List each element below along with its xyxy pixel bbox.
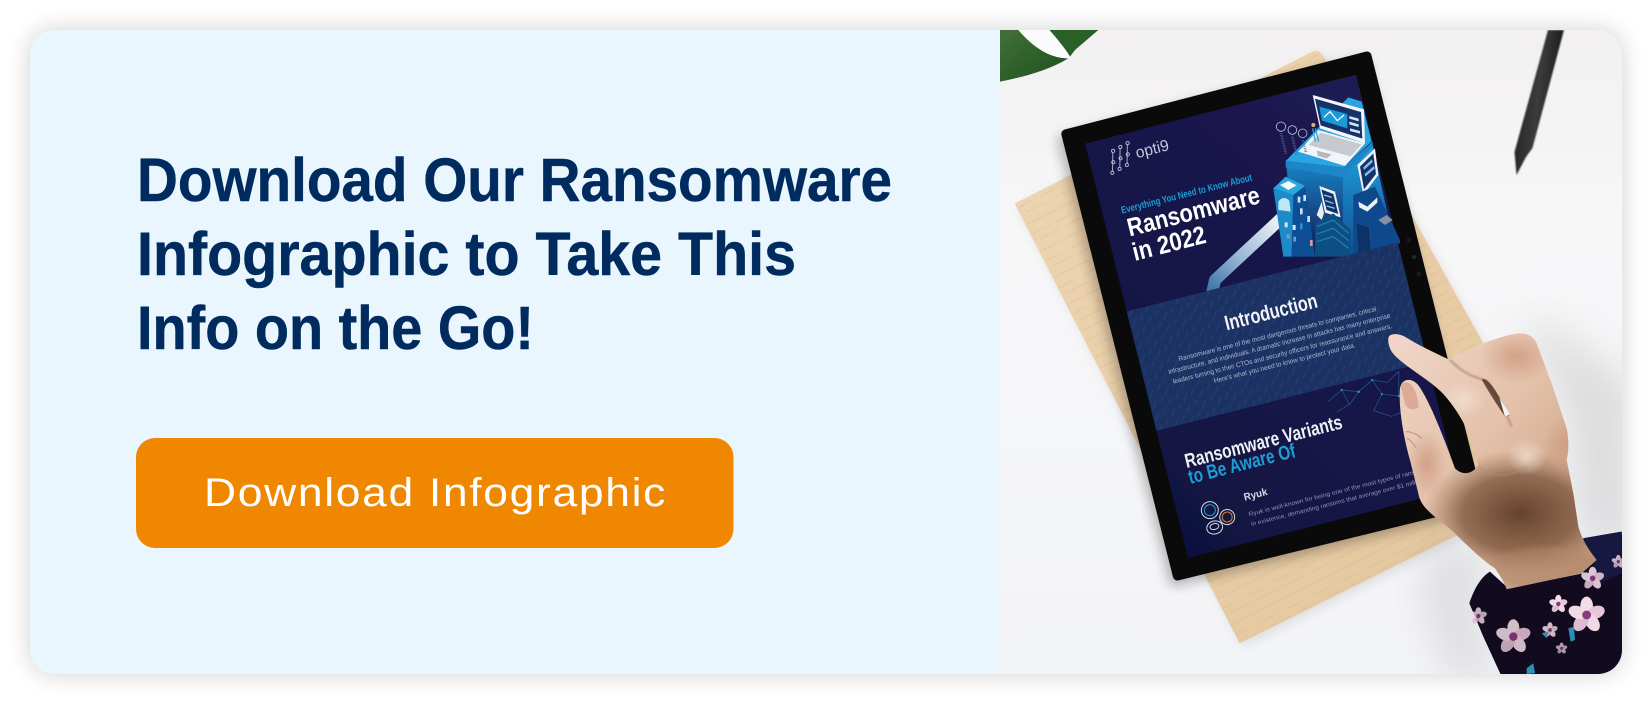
network pattern (1328, 371, 1401, 417)
sleeve (1469, 532, 1622, 674)
hero title: in 2022 (1129, 221, 1209, 267)
variant: ryuk: Ryuk (1243, 487, 1269, 504)
leaf (1000, 30, 1098, 82)
introduction heading: Introduction (1222, 290, 1320, 335)
screen content (1110, 140, 1424, 535)
hero title (1120, 174, 1260, 261)
hand shadow (1532, 324, 1622, 538)
introduction paragraph: leaders turning to their CTOs and security officers for reassurance and answers. (1172, 323, 1393, 386)
introduction paragraph: Ransomware is one of the most dangerous threats to companies, critical (1178, 306, 1378, 363)
button: download infographic: Download Infographic (204, 471, 667, 515)
pen (1514, 30, 1564, 175)
variant: ryuk: Ryuk is well-known for being one of the most types of ransomware (1248, 464, 1439, 518)
notebook (1015, 51, 1485, 645)
finger gap (1482, 379, 1510, 417)
panel: left call to action background (30, 30, 1010, 674)
illustration: isometric server towers and laptop (1212, 95, 1400, 293)
fingernails (1388, 337, 1389, 338)
heading: Info on the Go! (137, 294, 534, 362)
introduction paragraph: infrastructure, and individuals. A dramatic increase in attacks has many enterprise (1168, 313, 1391, 376)
variant: ryuk: in existence, demanding ransoms that average over $1 million (1251, 478, 1424, 528)
logo: opti9: opti9 (1134, 137, 1171, 162)
tablet shadow (1057, 57, 1480, 587)
section title: ransomware variants: Ransomware Variants (1183, 412, 1345, 473)
button: download infographic (136, 438, 734, 548)
panel: introduction band (1127, 243, 1427, 431)
hand shape (1388, 330, 1617, 590)
icon: coins (1200, 501, 1236, 535)
logo: opti9 (1110, 140, 1168, 175)
hero title: Everything You Need to Know About (1120, 172, 1254, 217)
section title: ransomware variants: to Be Aware Of (1186, 440, 1298, 489)
hand (1388, 320, 1637, 680)
heading (140, 156, 890, 350)
tablet camera dots (1407, 238, 1421, 276)
introduction paragraph: Here's what you need to know to protect your data. (1213, 342, 1356, 385)
heading: Download Our Ransomware (137, 146, 892, 214)
tablet (1066, 56, 1479, 576)
tablet screen (1085, 75, 1459, 558)
heading: Infographic to Take This (137, 220, 796, 288)
section title: ransomware variants (1184, 418, 1342, 484)
hero title: Ransomware (1124, 182, 1263, 242)
panel: tablet photo (1000, 30, 1637, 680)
